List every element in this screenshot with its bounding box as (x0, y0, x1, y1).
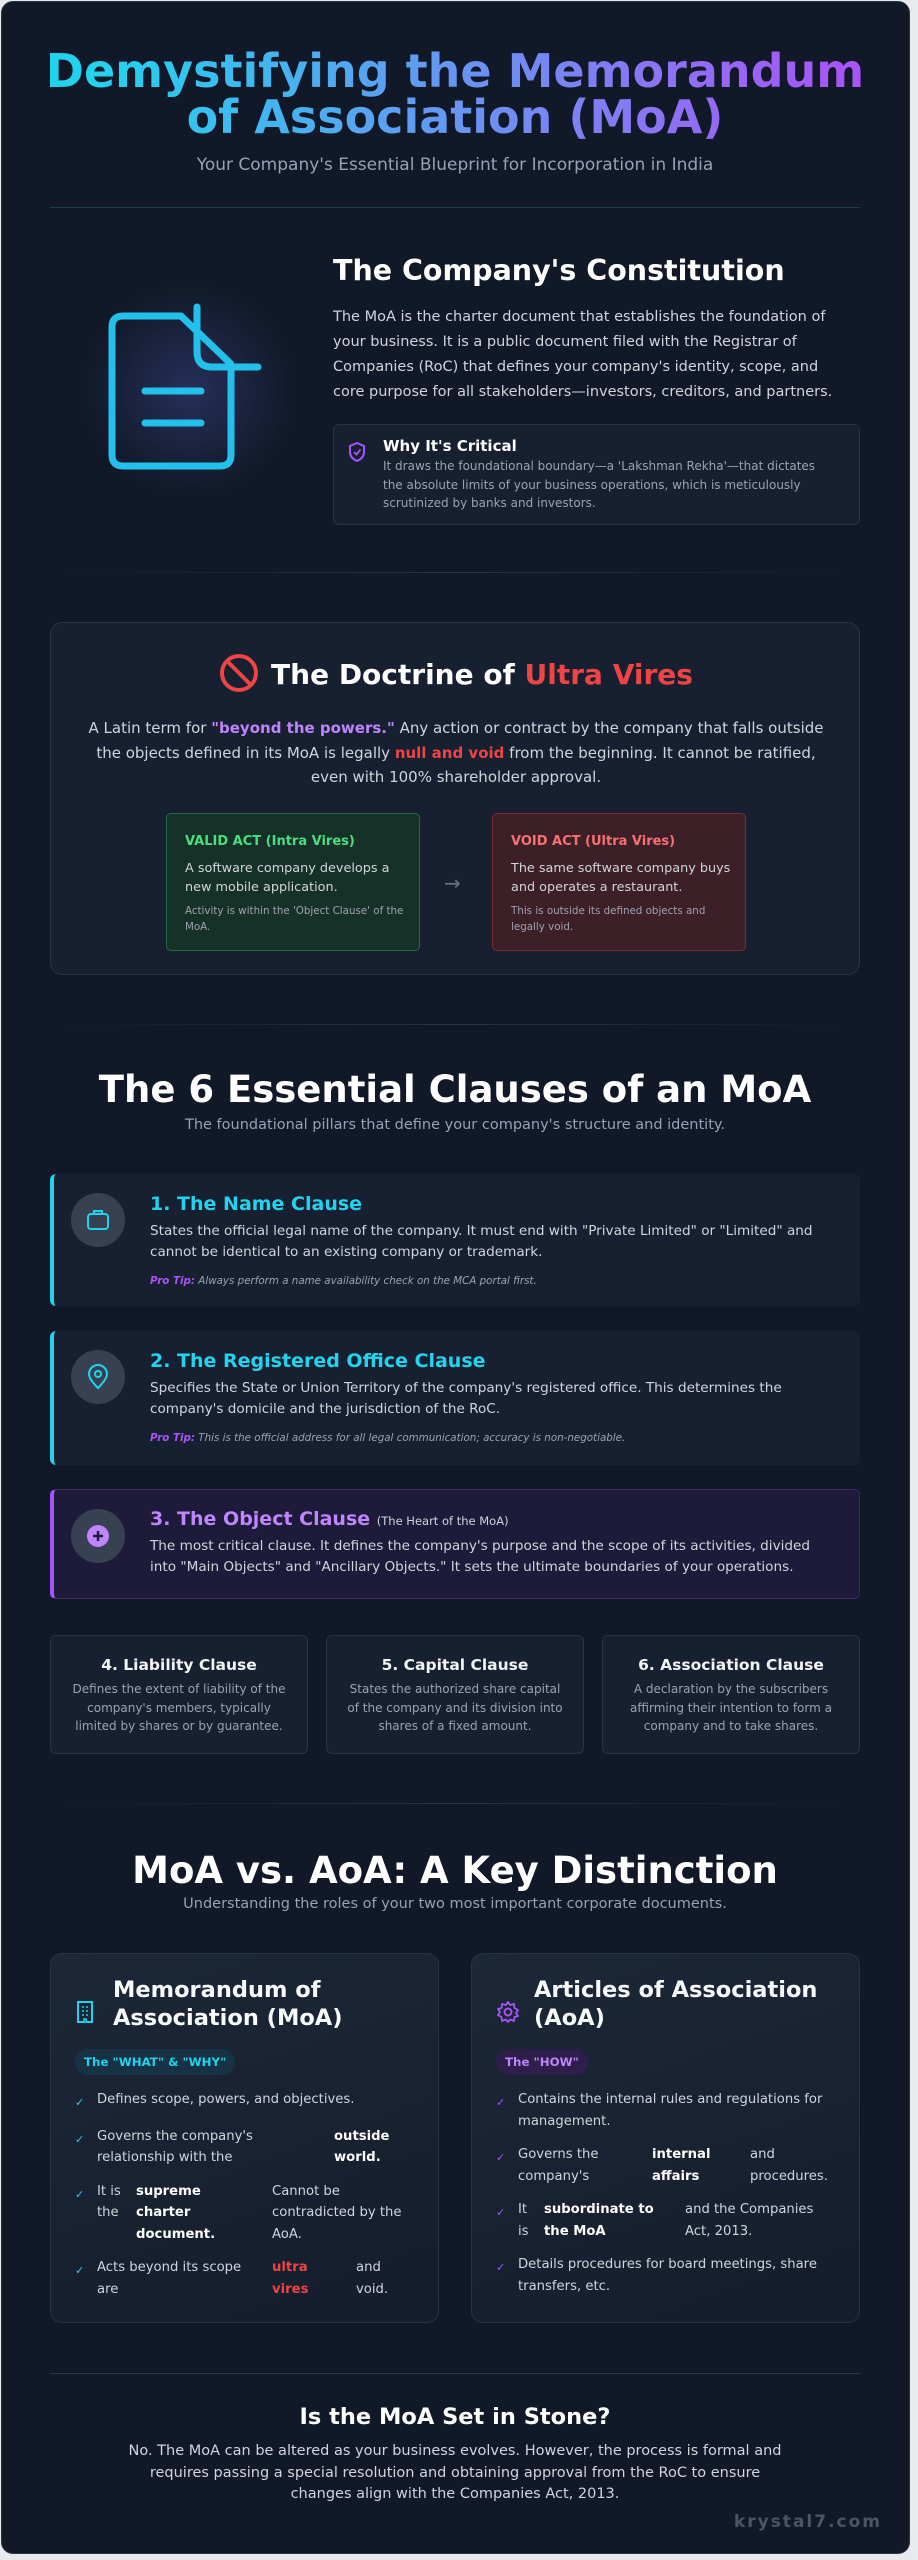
panel: AoA: Details procedures for board meetings, share transfers, etc. (518, 2257, 817, 2294)
box: valid act: VALID ACT (Intra Vires) (185, 834, 355, 849)
heading: MoA vs AoA: MoA vs. AoA: A Key Distinction (132, 1849, 778, 1892)
subheading: Understanding the roles of your two most important corporate documents. (183, 1896, 727, 1912)
clause 3: object (50, 1489, 860, 1599)
clause 2: registered office: Pro Tip: This is the official address for all legal communication; accuracy is non-negotiable. (150, 1432, 625, 1444)
text: set in stone: No. The MoA can be altered as your business evolves. However, the process is formal and requires passing a special resolution and obtaining approval from the RoC to ensure changes align with the Companies Act, 2013. (128, 2443, 781, 2502)
panel: MoA: and void. (356, 2260, 388, 2296)
panel: AoA: internal affairs (652, 2147, 710, 2184)
panel: AoA: ✓ (496, 2096, 505, 2109)
panel: MoA: ✓ (75, 2188, 84, 2200)
icon: plus circle (71, 1509, 125, 1563)
panel: MoA: Governs the company's relationship with the (97, 2128, 253, 2165)
panel: MoA: Defines scope, powers, and objectives. (97, 2092, 354, 2107)
heading: ultra vires with prohibition icon: The Doctrine of Ultra Vires (271, 658, 693, 691)
box: void act (492, 813, 746, 951)
box: void act: The same software company buys and operates a restaurant. (511, 861, 730, 894)
panel: AoA: ✓ (496, 2151, 505, 2164)
panel: MoA (50, 1953, 439, 2323)
heading: 6 clauses: The 6 Essential Clauses of an MoA (99, 1068, 811, 1111)
icon: document with glow (80, 280, 300, 500)
clause 2: registered office (50, 1331, 860, 1465)
title: of Association (MoA) (187, 90, 723, 144)
icon: location pin (71, 1350, 125, 1404)
text: constitution: The MoA is the charter document that establishes the foundation of your business. It is a public document filed with the Registrar of Companies (RoC) that defines your company's identity, scope, and core purpose for all stakeholders—investors, creditors, and partners. (333, 309, 832, 400)
panel: AoA: It is (518, 2202, 529, 2238)
heading: constitution: The Company's Constitution (333, 254, 785, 287)
clause 2: registered office: 2. The Registered Office Clause (150, 1350, 486, 1372)
title (0, 48, 910, 140)
panel: AoA: The "HOW" (505, 2055, 579, 2069)
panel: AoA: ✓ (496, 2261, 505, 2274)
clause 2: registered office: Specifies the State or Union Territory of the company's registered office. This determines the company's domicile and the jurisdiction of the RoC. (150, 1380, 782, 1417)
panel: MoA: The "WHAT" & "WHY" (84, 2055, 226, 2069)
clause 3: object: 3. The Object Clause (The Heart of the MoA) (150, 1508, 509, 1530)
panel: AoA: ✓ (496, 2206, 505, 2219)
clause 6: association: A declaration by the subscribers affirming their intention to form a company and to take shares. (630, 1682, 832, 1733)
icon: building (77, 2001, 93, 2023)
heading: set in stone: Is the MoA Set in Stone? (300, 2404, 610, 2430)
panel: MoA: supreme charter document. (136, 2184, 215, 2242)
callout: why critical: It draws the foundational boundary—a 'Lakshman Rekha'—that dictates the absolute limits of your business operations, which is meticulously scrutinized by banks and investors. (383, 459, 815, 510)
title: Demystifying the Memorandum (46, 44, 864, 98)
panel: AoA: Contains the internal rules and regulations for management. (518, 2092, 822, 2128)
panel: ultra vires (50, 622, 860, 975)
watermark: krystal7.com (734, 2512, 882, 2532)
box: valid act: Activity is within the 'Object Clause' of the MoA. (185, 905, 403, 933)
clause 5: capital (326, 1635, 584, 1754)
panel: AoA: Governs the company's (518, 2147, 598, 2184)
panel: AoA: (AoA) (534, 2005, 605, 2031)
clause 1: name: States the official legal name of the company. It must end with "Private Limited" or "Limited" and cannot be identical to an existing company or trademark. (150, 1223, 813, 1260)
box: valid act: A software company develops a new mobile application. (185, 861, 389, 894)
clause 4: liability: 4. Liability Clause (101, 1656, 257, 1674)
callout: why critical: Why It's Critical (383, 437, 517, 455)
icon: shield (349, 442, 365, 462)
clause 1: name: 1. The Name Clause (150, 1193, 362, 1215)
clause 5: capital: 5. Capital Clause (382, 1656, 528, 1674)
panel: MoA: Cannot be contradicted by the AoA. (272, 2184, 402, 2242)
icon: gear (497, 2001, 519, 2023)
subtitle: Your Company's Essential Blueprint for Incorporation in India (197, 155, 713, 175)
panel: AoA: and procedures. (750, 2147, 828, 2184)
panel: AoA: and the Companies Act, 2013. (685, 2202, 813, 2238)
clause 4: liability (50, 1635, 308, 1754)
arrow: → (444, 871, 461, 895)
box: void act: This is outside its defined objects and legally void. (511, 905, 705, 933)
panel: MoA: It is the (97, 2184, 121, 2220)
text: definition: A Latin term for "beyond the powers." Any action or contract by the company that falls outside the objects defined in its MoA is legally null and void from the beginning. It cannot be ratified, even with 100% shareholder approval. (88, 719, 823, 786)
box: valid act (166, 813, 420, 951)
callout: why critical (333, 424, 860, 525)
panel: MoA: Association (MoA) (113, 2005, 342, 2031)
clause 6: association (602, 1635, 860, 1754)
clause 6: association: 6. Association Clause (638, 1656, 824, 1674)
panel: MoA: ✓ (75, 2132, 84, 2146)
panel: MoA: Acts beyond its scope are (97, 2260, 241, 2296)
panel: AoA: Articles of Association (534, 1977, 817, 2003)
clause 4: liability: Defines the extent of liability of the company's members, typically limited by shares or by guarantee. (73, 1682, 285, 1733)
box: void act: VOID ACT (Ultra Vires) (511, 834, 675, 849)
panel: AoA (471, 1953, 860, 2323)
panel: AoA: subordinate to the MoA (544, 2202, 654, 2238)
clause 1: name (50, 1174, 860, 1306)
clause 3: object: The most critical clause. It defines the company's purpose and the scope of its activities, divided into "Main Objects" and "Ancillary Objects." It sets the ultimate boundaries of your operations. (150, 1538, 810, 1575)
clause 1: name: Pro Tip: Always perform a name availability check on the MCA portal first. (150, 1275, 537, 1287)
clause 5: capital: States the authorized share capital of the company and its division into shares of a fixed amount. (347, 1682, 563, 1733)
panel: MoA: Memorandum of (113, 1977, 320, 2003)
subheading: The foundational pillars that define your company's structure and identity. (185, 1117, 725, 1133)
panel: MoA: ultra vires (272, 2260, 308, 2296)
panel: MoA: ✓ (75, 2264, 84, 2277)
panel: MoA: ✓ (75, 2096, 84, 2109)
icon: briefcase (71, 1193, 125, 1247)
panel: MoA: outside world. (334, 2128, 390, 2165)
